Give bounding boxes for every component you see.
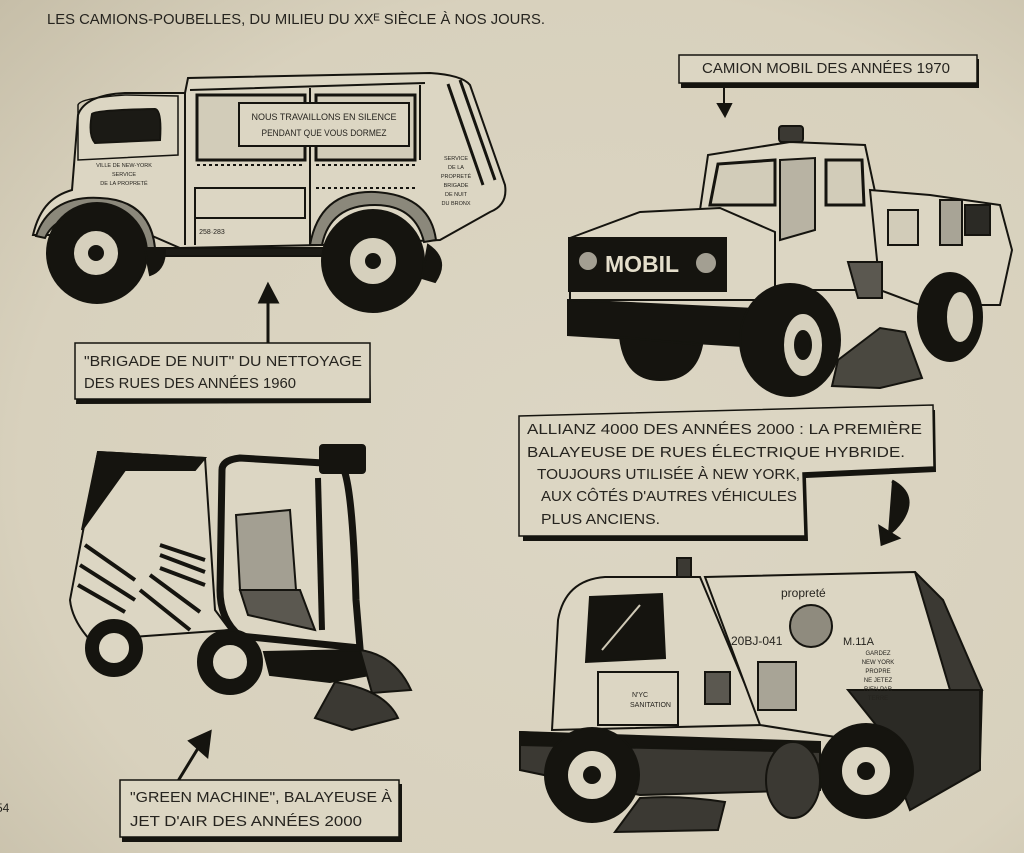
body	[705, 572, 982, 760]
wheel arches	[36, 198, 155, 248]
cab	[700, 142, 880, 290]
arrow: to night brigade truck	[260, 285, 277, 344]
caption: green machine: JET D'AIR DES ANNÉES 2000	[130, 813, 362, 830]
caption: Allianz 4000: AUX CÔTÉS D'AUTRES VÉHICULES	[541, 488, 797, 505]
caption: green machine: "GREEN MACHINE", BALAYEUSE À	[130, 789, 392, 806]
illustration: Allianz 4000	[520, 558, 982, 832]
door text: DE LA	[448, 165, 464, 171]
caption: Allianz 4000: ALLIANZ 4000 DES ANNÉES 2000 : LA PREMIÈRE	[527, 421, 922, 438]
arrow: to Mobil truck	[718, 88, 731, 116]
beacon	[677, 558, 691, 578]
caption: Allianz 4000: BALAYEUSE DE RUES ÉLECTRIQUE HYBRIDE.	[527, 444, 905, 461]
bonnet	[570, 208, 775, 300]
illustration: Allianz 4000: 20BJ-041	[731, 634, 783, 648]
side windows	[197, 95, 415, 160]
illustration: night brigade truck	[33, 73, 505, 312]
illustration: Mobil truck	[568, 126, 1012, 396]
brush	[832, 328, 922, 388]
banner: PENDANT QUE VOUS DORMEZ	[262, 128, 387, 139]
front	[569, 238, 726, 291]
cab	[552, 577, 762, 730]
illustration: Mobil truck: MOBIL	[605, 251, 679, 277]
illustration: Allianz 4000: NEW YORK	[862, 660, 894, 666]
door text: SERVICE	[112, 172, 136, 178]
caption: night brigade	[75, 343, 371, 404]
door text: DE NUIT	[445, 192, 468, 198]
illustration: green machine	[70, 445, 411, 730]
title text: LES CAMIONS-POUBELLES, DU MILIEU DU XXᴱ SIÈCLE À NOS JOURS.	[47, 11, 545, 28]
illustration: Allianz 4000: TERRE	[868, 696, 888, 702]
bumper	[568, 300, 775, 348]
illustration: Allianz 4000: propreté	[781, 586, 826, 600]
illustration: Allianz 4000: GARDEZ	[865, 651, 891, 657]
brushes	[264, 650, 370, 682]
door text: BRIGADE	[444, 183, 469, 189]
door text	[96, 156, 471, 236]
door text: 258·283	[199, 229, 225, 236]
caption: Allianz 4000: TOUJOURS UTILISÉE À NEW YORK,	[537, 466, 800, 483]
wheels	[86, 620, 142, 676]
caption: Allianz 4000: PLUS ANCIENS.	[541, 512, 660, 528]
caption: green machine	[120, 780, 402, 842]
wheels	[620, 337, 702, 380]
emblem and lettering	[790, 605, 832, 647]
caption: Mobil truck	[679, 55, 979, 88]
wheels	[47, 203, 147, 303]
beacon	[779, 126, 803, 142]
caption: Allianz 4000	[519, 405, 936, 541]
door text: SERVICE	[444, 156, 468, 162]
rear unit	[870, 190, 1012, 305]
illustration: Allianz 4000: N'YC	[632, 692, 648, 699]
caption: Mobil truck: CAMION MOBIL DES ANNÉES 1970	[702, 60, 950, 77]
truck body	[33, 73, 505, 248]
window	[586, 594, 665, 662]
illustration: Allianz 4000: PROPRE	[865, 669, 891, 675]
body	[70, 452, 230, 640]
cab window	[91, 109, 160, 143]
banner: NOUS TRAVAILLONS EN SILENCE	[252, 112, 396, 123]
banner	[239, 103, 409, 146]
cab	[220, 458, 360, 648]
illustration: Allianz 4000: M.11A	[843, 636, 875, 648]
illustration: Allianz 4000: NE JETEZ	[864, 678, 892, 684]
panels	[758, 662, 796, 710]
caption: night brigade: DES RUES DES ANNÉES 1960	[84, 375, 296, 392]
arrow: to green machine	[178, 732, 210, 781]
illustration: Allianz 4000: SANITATION	[630, 702, 671, 709]
brushes	[615, 797, 725, 832]
arrow: to Allianz 4000	[880, 481, 908, 544]
door text: PROPRETÉ	[441, 173, 471, 180]
door text: VILLE DE NEW-YORK	[96, 163, 152, 169]
door text: DU BRONX	[441, 201, 471, 207]
wheels	[545, 728, 639, 822]
chassis	[520, 732, 820, 795]
illustration: Allianz 4000: RIEN PAR	[864, 687, 893, 693]
door text: DE LA PROPRETÉ	[100, 180, 148, 187]
caption: night brigade: "BRIGADE DE NUIT" DU NETTOYAGE	[84, 354, 362, 370]
